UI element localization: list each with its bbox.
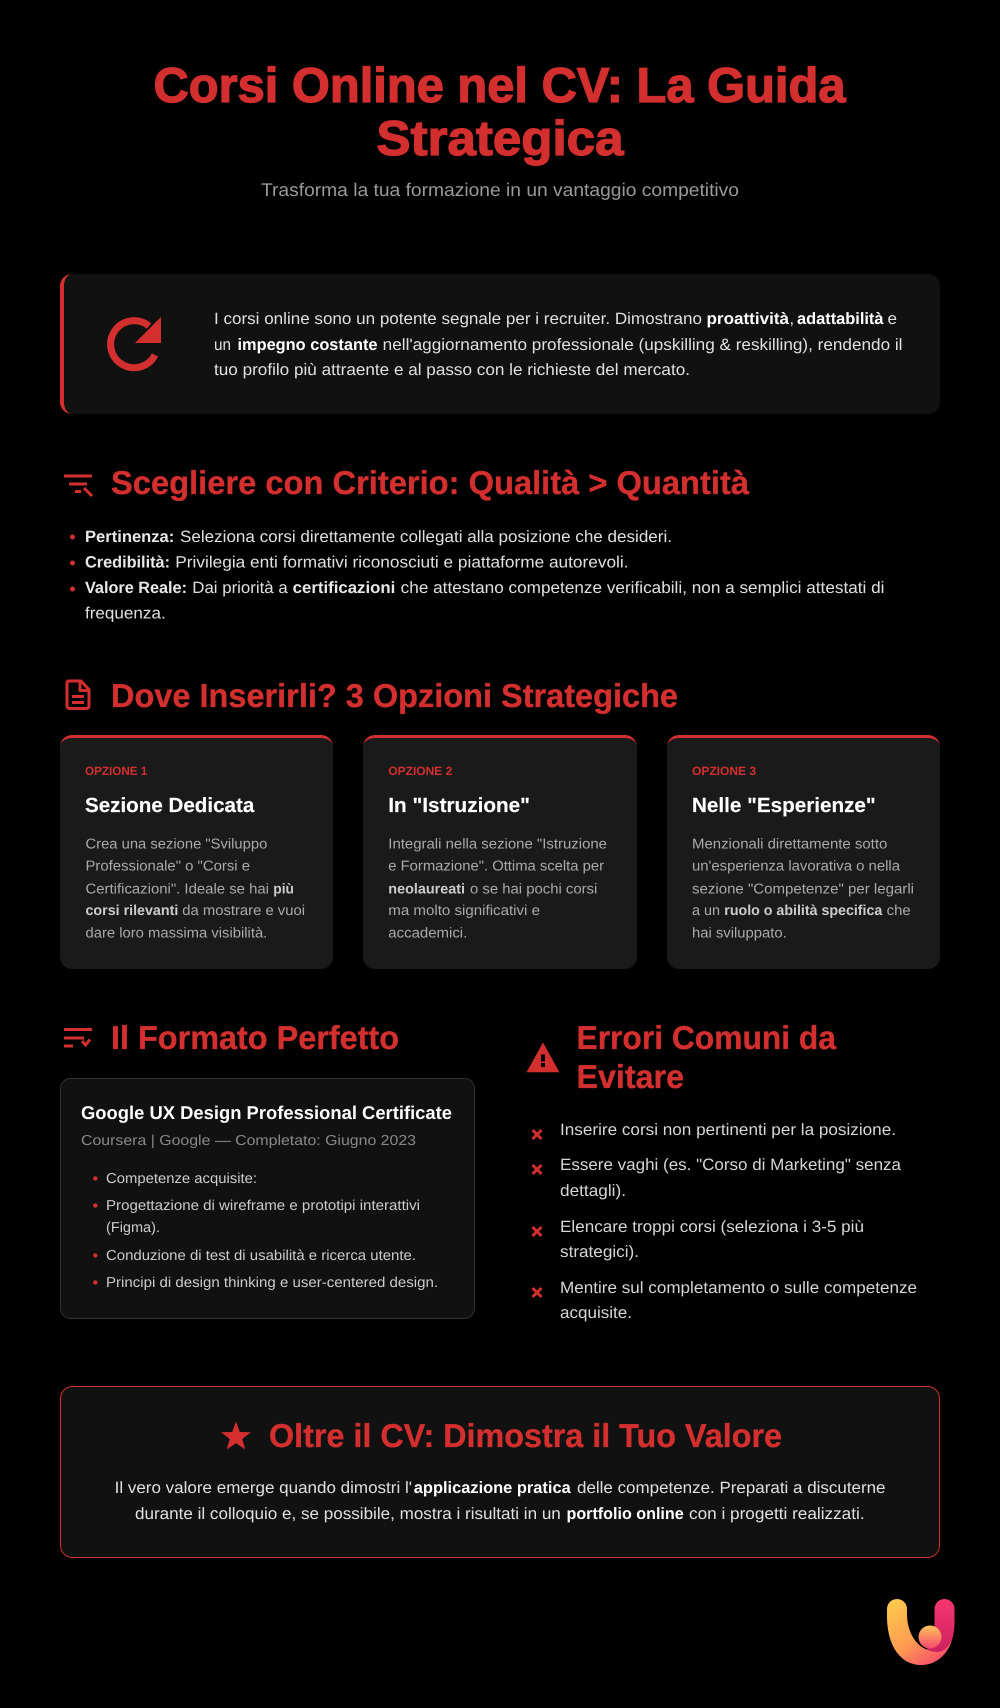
panel: opzione 1: Sezione Dedicata <box>85 794 255 817</box>
heading: errori comuni: Evitare <box>576 1058 684 1095</box>
panel: opzione 2: OPZIONE 2 <box>388 764 453 778</box>
panel: opzione 1: Certificazioni". Ideale se hai <box>86 881 269 897</box>
intro text <box>214 310 902 379</box>
list: criteria <box>70 528 884 622</box>
icon: refresh arrow <box>111 317 161 368</box>
list: criteria: Valore Reale: <box>85 579 187 597</box>
list: criteria: che attestano competenze verificabili, non a semplici attestati di <box>401 579 884 597</box>
panel: oltre il cv: Oltre il CV: Dimostra il Tuo Valore <box>269 1417 782 1454</box>
heading: dove inserirli: Dove Inserirli? 3 Opzioni Strategiche <box>111 677 678 714</box>
closing text: portfolio online <box>566 1505 684 1523</box>
panel: opzione 2: ma molto significativi e <box>388 903 540 919</box>
panel: oltre il cv <box>60 1386 940 1558</box>
intro text: , <box>790 310 794 328</box>
icon: logo <box>887 1599 954 1665</box>
panel: opzione 3: che <box>887 903 911 919</box>
list: errors: acquisite. <box>560 1304 632 1322</box>
heading: scegliere con criterio: Scegliere con Criterio: Qualità > Quantità <box>111 464 750 501</box>
icon: x marks <box>532 1130 542 1297</box>
panel: opzione 2 <box>363 735 637 969</box>
certificate bullet list: (Figma). <box>106 1220 160 1236</box>
list: errors: strategici). <box>560 1243 639 1261</box>
icon: document <box>67 681 89 708</box>
icon: checklist lines <box>64 1030 92 1046</box>
panel: opzione 3 <box>667 735 940 969</box>
panel: opzione 3: a un <box>692 903 720 919</box>
list: errors: Essere vaghi (es. "Corso di Marketing" senza <box>560 1156 902 1174</box>
icon: warning triangle <box>527 1043 559 1072</box>
certificate bullet list: Progettazione di wireframe e prototipi interattivi <box>106 1198 420 1214</box>
closing text: delle competenze. Preparati a discuterne <box>577 1479 886 1497</box>
list: criteria: Privilegia enti formativi riconosciuti e piattaforme autorevoli. <box>175 554 629 572</box>
panel: opzione 1: da mostrare e vuoi <box>182 903 305 919</box>
panel: opzione 2: neolaureati <box>388 881 465 897</box>
intro text: nell'aggiornamento professionale (upskilling & reskilling), rendendo il <box>383 336 902 354</box>
panel: opzione 2: In "Istruzione" <box>388 794 530 817</box>
intro text: impegno costante <box>238 336 378 354</box>
list: criteria: Pertinenza: <box>85 528 174 546</box>
certificate bullet list <box>93 1171 438 1291</box>
panel: opzione 2: e Formazione". Ottima scelta per <box>388 859 604 875</box>
certificate bullet list: Principi di design thinking e user-centered design. <box>106 1275 438 1291</box>
list: errors: dettagli). <box>560 1182 626 1200</box>
panel: opzione 2: o se hai pochi corsi <box>470 881 597 897</box>
list: errors: Elencare troppi corsi (seleziona i 3-5 più <box>560 1218 864 1236</box>
subtitle: Trasforma la tua formazione in un vantaggio competitivo <box>261 179 739 200</box>
heading: il formato perfetto: Il Formato Perfetto <box>111 1019 399 1056</box>
intro text: tuo profilo più attraente e al passo con le richieste del mercato. <box>214 361 690 379</box>
panel: opzione 2: Integrali nella sezione "Istruzione <box>388 836 607 852</box>
closing text: durante il colloquio e, se possibile, mostra i risultati in un <box>135 1505 561 1523</box>
closing text: applicazione pratica <box>414 1479 572 1497</box>
icon: filter search <box>64 476 92 496</box>
list: errors <box>532 1121 917 1322</box>
panel: intro <box>60 274 940 414</box>
closing text: con i progetti realizzati. <box>689 1505 865 1523</box>
heading: errori comuni: Errori Comuni da <box>576 1019 837 1056</box>
panel: opzione 1: Professionale" o "Corsi e <box>86 859 250 875</box>
intro text: adattabilità <box>797 310 884 328</box>
intro text: I corsi online sono un potente segnale per i recruiter. Dimostrano <box>214 310 702 328</box>
certificate bullet list: Conduzione di test di usabilità e ricerca utente. <box>106 1248 416 1264</box>
intro text: e <box>888 310 897 328</box>
certificate bullet list: Competenze acquisite: <box>106 1171 257 1187</box>
list: criteria: Dai priorità a <box>192 579 289 597</box>
list: errors: Mentire sul completamento o sulle competenze <box>560 1279 917 1297</box>
icon: star <box>221 1422 251 1450</box>
heading: errori comuni <box>527 1019 837 1095</box>
intro text: proattività <box>706 310 790 328</box>
panel: opzione 1: dare loro massima visibilità. <box>86 925 267 941</box>
panel: opzione 3: Menzionali direttamente sotto <box>692 836 887 852</box>
title: Strategica <box>376 112 624 166</box>
panel: opzione 1: Crea una sezione "Sviluppo <box>86 836 267 852</box>
panel: opzione 1 <box>60 735 333 969</box>
panel: opzione 3: hai sviluppato. <box>692 925 787 941</box>
panel: opzione 1: corsi rilevanti <box>86 903 178 919</box>
panel: opzione 3: ruolo o abilità specifica <box>724 903 883 919</box>
list: criteria: frequenza. <box>85 604 166 622</box>
title <box>154 59 846 166</box>
panel: opzione 3: Nelle "Esperienze" <box>692 794 876 817</box>
panel: opzione 1: più <box>273 881 294 897</box>
panel: opzione 3: un'esperienza lavorativa o nella <box>692 859 900 875</box>
list: criteria: Seleziona corsi direttamente collegati alla posizione che desideri. <box>180 528 672 546</box>
title: Corsi Online nel CV: La Guida <box>154 59 846 113</box>
closing text: Il vero valore emerge quando dimostri l' <box>115 1479 412 1497</box>
panel: certificate example: Google UX Design Professional Certificate <box>81 1102 452 1123</box>
intro text: un <box>214 336 231 354</box>
panel: opzione 3: OPZIONE 3 <box>692 764 756 778</box>
list: criteria: certificazioni <box>293 579 395 597</box>
closing text <box>115 1479 886 1523</box>
panel: opzione 3: sezione "Competenze" per legarli <box>692 881 914 897</box>
panel: certificate example <box>60 1078 474 1318</box>
panel: opzione 1: OPZIONE 1 <box>85 764 148 778</box>
list: criteria: Credibilità: <box>85 554 170 572</box>
list: errors: Inserire corsi non pertinenti per la posizione. <box>560 1121 896 1139</box>
panel: certificate example: Coursera | Google — Completato: Giugno 2023 <box>81 1133 416 1149</box>
panel: opzione 2: accademici. <box>388 925 467 941</box>
